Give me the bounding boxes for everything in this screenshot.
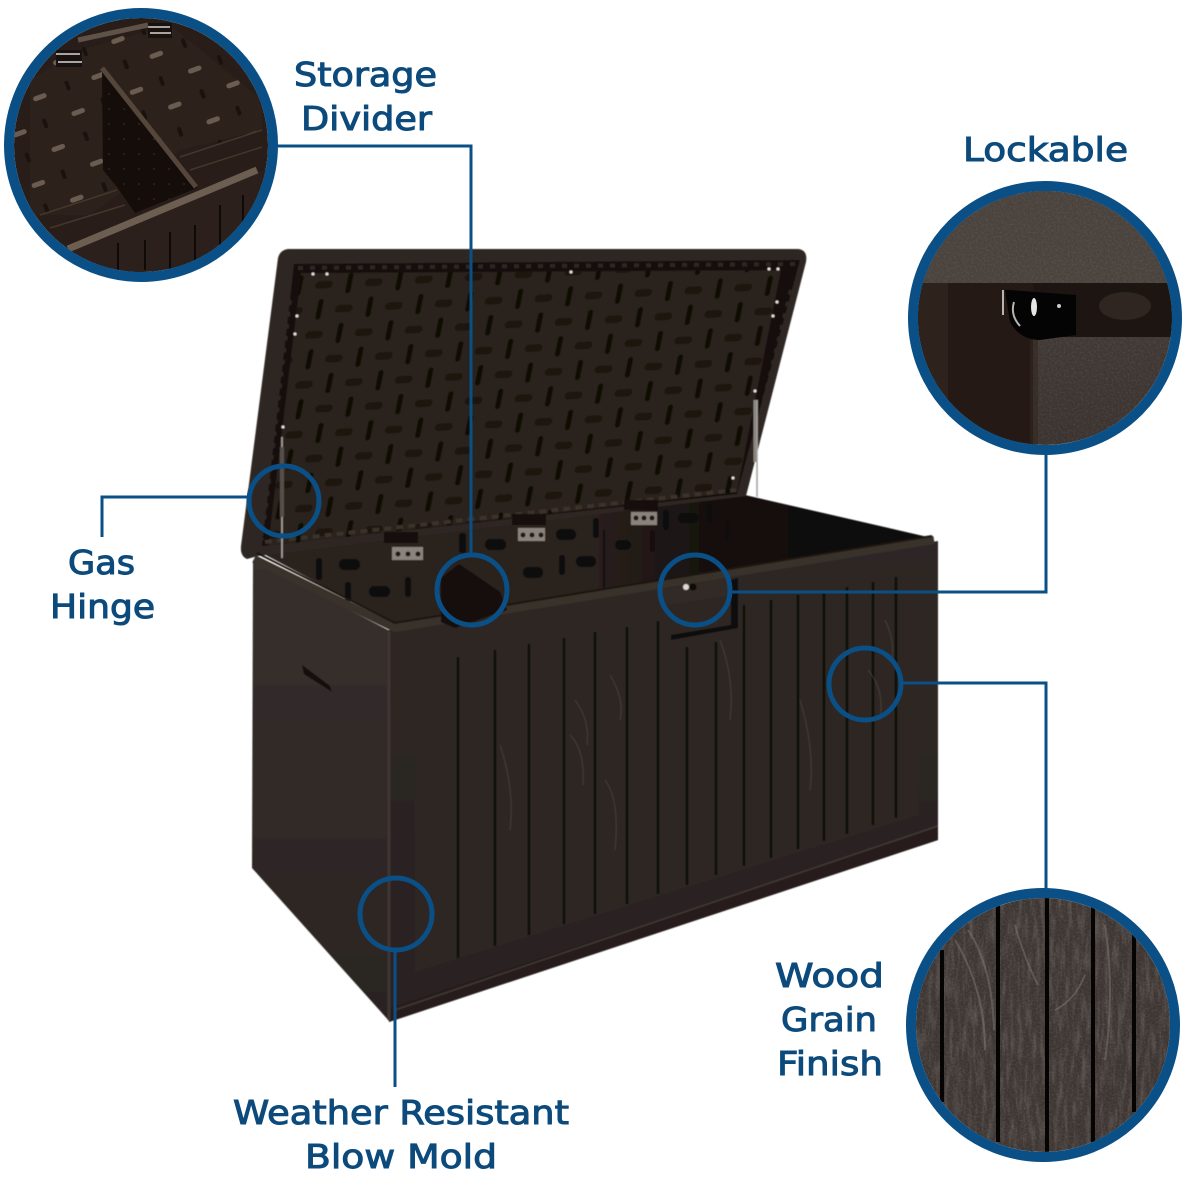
label: weather resistant blow mold: Blow Mold: [305, 1137, 497, 1176]
leader: storage divider: [277, 146, 471, 553]
marker rings on box: [249, 466, 901, 950]
label: wood grain finish: [775, 956, 884, 1083]
label: wood grain finish: Wood: [775, 956, 884, 995]
ring: wood grain: [829, 648, 901, 720]
gas struts: [282, 400, 757, 558]
leader: lockable: [732, 455, 1046, 592]
label: wood grain finish: Grain: [781, 1000, 877, 1039]
ring: lock: [660, 555, 730, 625]
divider: [441, 564, 507, 628]
ring: divider: [437, 555, 507, 625]
label: storage divider: [294, 55, 437, 138]
detail circle: storage divider: [4, 8, 278, 282]
latch recess: [671, 578, 738, 640]
lid outer shell: [241, 249, 806, 559]
label: gas hinge: Hinge: [50, 587, 155, 626]
storage box product: [241, 249, 938, 1022]
label: weather resistant blow mold: Weather Resistant: [233, 1093, 569, 1132]
label: storage divider: Storage: [294, 55, 437, 94]
detail circle: wood grain finish: [910, 890, 1180, 1160]
ring: weather resistant: [360, 878, 432, 950]
label: weather resistant blow mold: [233, 1093, 569, 1176]
lid inner panel with peg pattern: [268, 270, 781, 546]
detail circle: lockable: [910, 180, 1182, 463]
rim: [254, 536, 934, 628]
lock hole: [683, 584, 696, 590]
hinges: [384, 500, 658, 560]
label: gas hinge: [50, 543, 155, 626]
leader lines: [102, 146, 1046, 1087]
label: lockable: Lockable: [963, 130, 1128, 169]
ring: gas hinge: [249, 466, 319, 536]
label: storage divider: Divider: [301, 99, 432, 138]
side face with handle: [252, 560, 392, 1022]
label: wood grain finish: Finish: [777, 1044, 883, 1083]
label: gas hinge: Gas: [68, 543, 135, 582]
leader: weather resistant: [394, 950, 396, 1087]
leader: wood grain: [902, 683, 1046, 889]
front face with planks: [389, 541, 938, 1022]
interior back wall: [262, 495, 932, 624]
lock mechanism: [1003, 290, 1076, 340]
leader: gas hinge: [102, 497, 248, 537]
wood grain marks: [500, 620, 893, 850]
